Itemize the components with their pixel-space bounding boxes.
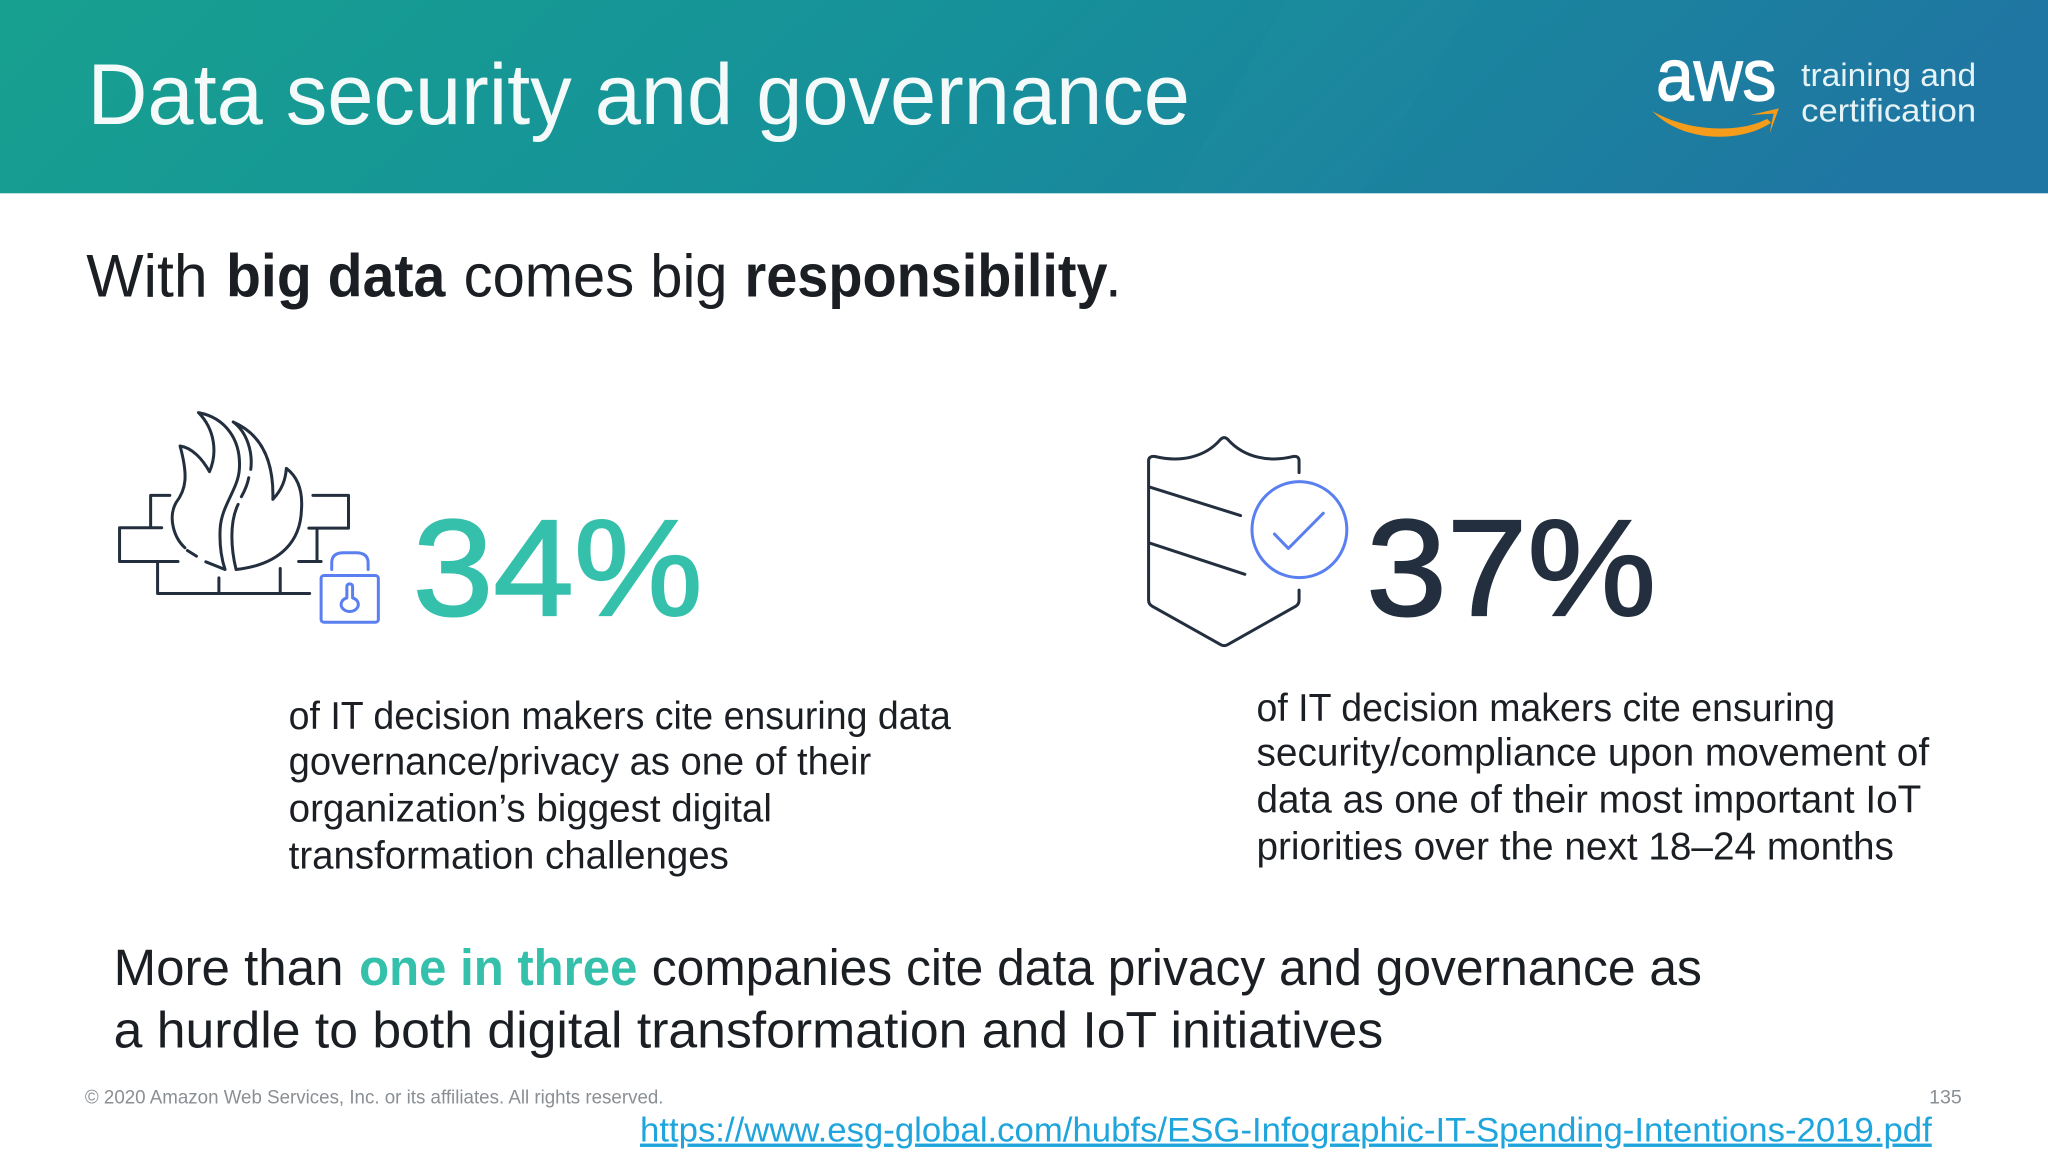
takeaway statement	[114, 939, 1702, 1059]
description: 37%: security/compliance upon movement of	[1256, 731, 1929, 774]
panel: 34% governance statistic	[120, 413, 951, 878]
description: 37%: priorities over the next 18–24 months	[1256, 825, 1894, 868]
panel: 37% security statistic	[1149, 438, 1929, 868]
title: Data security and governance	[88, 47, 1190, 143]
subtitle	[86, 242, 1122, 309]
description: 34%: transformation challenges	[289, 835, 729, 878]
source link: https://www.esg-global.com/hubfs/ESG-Infographic-IT-Spending-Intentions-2019.pdf	[640, 1112, 1932, 1150]
logo caption: training and	[1801, 56, 1976, 93]
description: 34%	[289, 695, 951, 878]
subtitle: .	[1105, 242, 1122, 309]
takeaway statement: More than	[114, 939, 344, 996]
logo caption	[1801, 56, 1976, 128]
aws training and certification logo	[1652, 36, 1976, 137]
subtitle: With	[86, 242, 208, 309]
takeaway statement: one in three	[359, 939, 637, 996]
page number: 135	[1929, 1087, 1962, 1109]
icon: shield with check mark	[1149, 438, 1347, 646]
description: 34%: of IT decision makers cite ensuring data	[289, 695, 951, 738]
logo smile arrow	[1652, 108, 1779, 137]
stat: 34%: 34%	[413, 492, 703, 645]
subtitle: big data	[226, 242, 446, 309]
stat: 37%: 37%	[1366, 492, 1656, 645]
subtitle: comes big	[464, 242, 728, 309]
description: 37%: of IT decision makers cite ensuring	[1256, 687, 1835, 730]
takeaway statement: companies cite data privacy and governance as	[652, 939, 1702, 996]
description: 37%	[1256, 687, 1929, 868]
icon: firewall with flame and padlock	[120, 413, 378, 622]
takeaway statement: a hurdle to both digital transformation and IoT initiatives	[114, 1002, 1383, 1059]
header band	[0, 0, 2048, 193]
logo caption: certification	[1801, 91, 1976, 128]
logo wordmark: aws	[1656, 36, 1776, 117]
copyright footer: © 2020 Amazon Web Services, Inc. or its affiliates. All rights reserved.	[85, 1087, 664, 1109]
description: 34%: organization’s biggest digital	[289, 788, 772, 831]
description: 34%: governance/privacy as one of their	[289, 741, 871, 784]
description: 37%: data as one of their most important IoT	[1256, 778, 1921, 821]
subtitle: responsibility	[744, 242, 1108, 309]
